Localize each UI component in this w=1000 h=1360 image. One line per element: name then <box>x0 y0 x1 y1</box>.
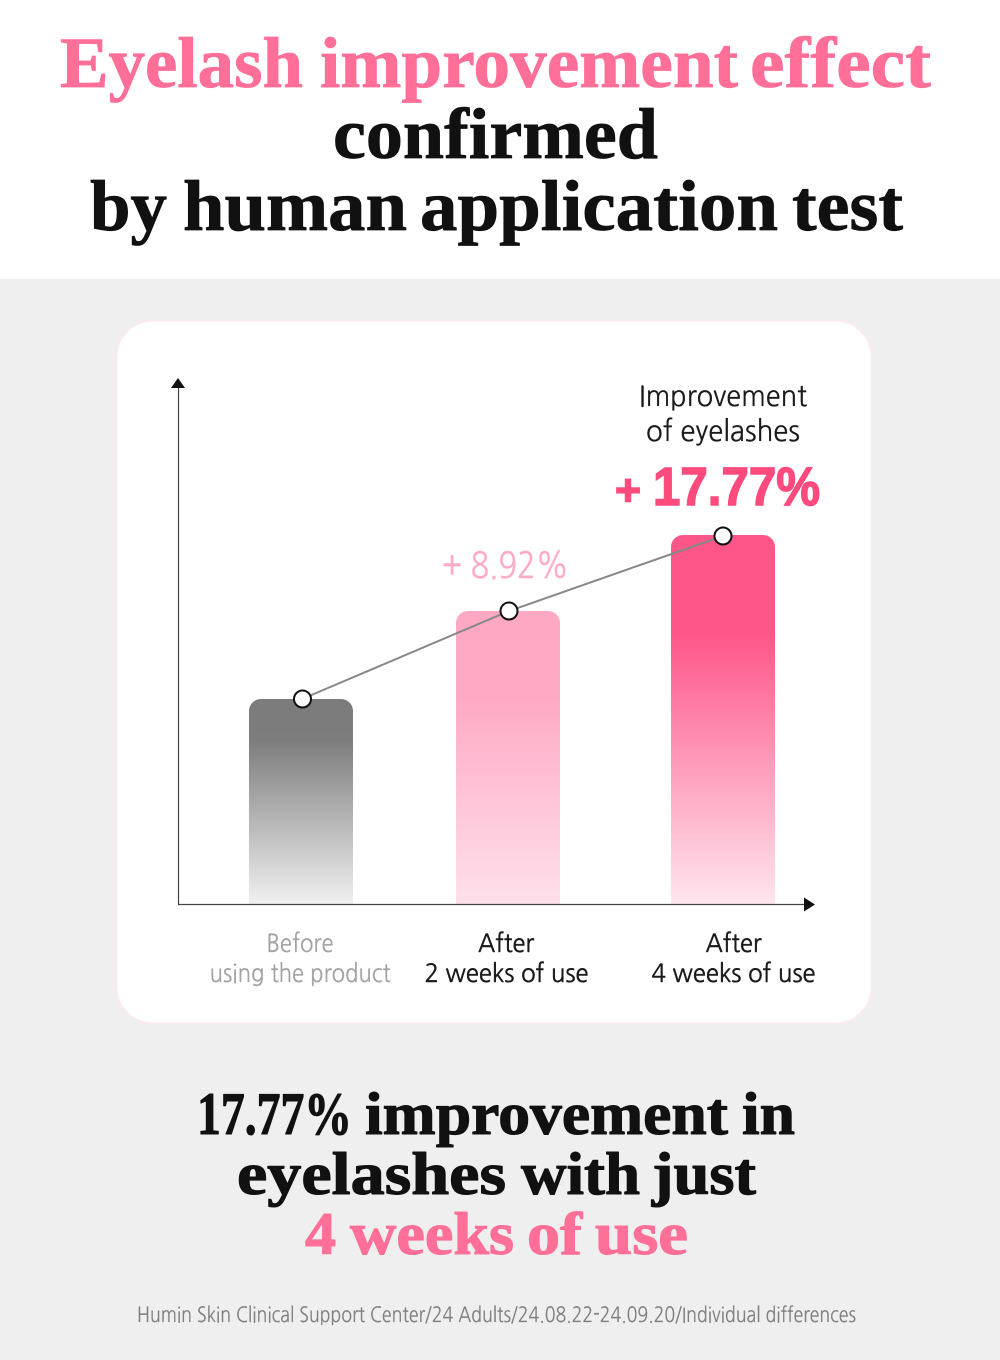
chart axes <box>171 378 815 912</box>
value: +17.77%: 17.77% <box>653 457 820 517</box>
callout: improvement of eyelashes: of eyelashes <box>646 417 800 446</box>
panel: chart card <box>117 321 871 1023</box>
summary heading: with <box>521 1141 640 1207</box>
value: +8.92%: + 8.92% <box>442 548 569 584</box>
title: Eyelash <box>60 23 303 103</box>
axis label: after 4 weeks: 4 weeks of use <box>652 961 816 986</box>
summary heading: improvement <box>365 1081 728 1147</box>
summary heading: just <box>651 1141 756 1207</box>
axis label: before: using the product <box>210 961 390 986</box>
title: by <box>90 166 167 246</box>
summary heading: 4 <box>305 1201 336 1267</box>
summary heading: in <box>742 1081 795 1147</box>
footnote: Humin Skin Clinical Support Center/24 Adults/24.08.22-24.09.20/Individual differences <box>137 1305 856 1326</box>
summary heading: use <box>595 1201 688 1267</box>
axis label: before: Before <box>266 931 334 956</box>
callout: improvement of eyelashes: Improvement <box>639 382 807 411</box>
page background <box>0 279 1000 1360</box>
bar: after 4 weeks <box>671 535 775 905</box>
value: +17.77%: + <box>615 466 641 515</box>
callout: improvement of eyelashes <box>639 382 807 446</box>
axis label: after 4 weeks <box>652 931 816 986</box>
axis label: after 4 weeks: After <box>706 931 762 956</box>
summary heading: eyelashes <box>237 1141 506 1207</box>
title: human <box>183 166 407 246</box>
title: application <box>420 166 778 246</box>
trend line with markers <box>294 528 732 708</box>
summary heading <box>197 1081 795 1267</box>
title: test <box>792 166 903 246</box>
axis label: after 2 weeks: 2 weeks of use <box>424 961 588 986</box>
title: confirmed <box>333 94 658 174</box>
summary heading: 17.77% <box>197 1081 352 1147</box>
title <box>60 23 931 246</box>
axis label: after 2 weeks: After <box>478 931 535 956</box>
summary heading: weeks <box>350 1201 514 1267</box>
bar: after 2 weeks <box>456 611 560 905</box>
axis label: after 2 weeks <box>424 931 588 986</box>
bar: before <box>249 699 353 905</box>
title: effect <box>750 23 931 103</box>
axis label: before <box>210 931 390 986</box>
summary heading: of <box>527 1201 583 1267</box>
title: improvement <box>320 23 738 103</box>
